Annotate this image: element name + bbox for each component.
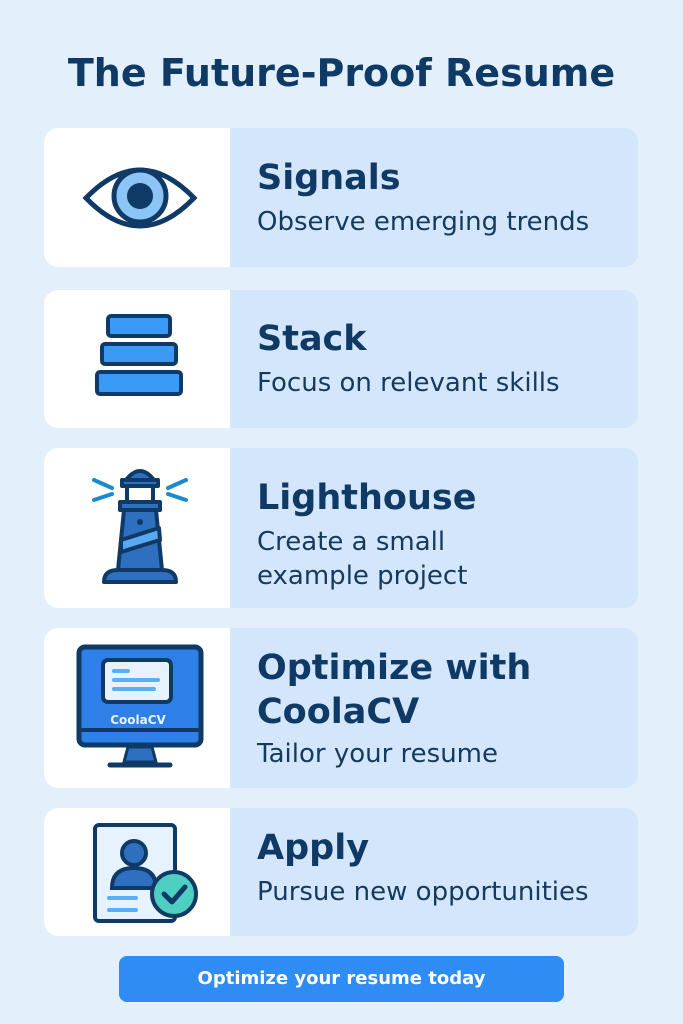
icon: monitor CoolaCV <box>76 644 204 768</box>
panel: stack <box>44 290 638 428</box>
text: signals: Signals <box>257 158 401 198</box>
text: lighthouse: example project <box>257 561 467 591</box>
panel: optimize <box>44 628 638 788</box>
text: signals: Observe emerging trends <box>257 207 589 237</box>
icon: monitor CoolaCV: CoolaCV <box>110 713 167 727</box>
panel: signals <box>44 128 638 267</box>
text: lighthouse: Create a small <box>257 527 445 557</box>
icon: eye <box>82 168 198 228</box>
text: apply: Apply <box>257 828 369 868</box>
icon: resume with check <box>93 823 198 923</box>
icon: stack <box>95 314 183 396</box>
text: apply: Pursue new opportunities <box>257 877 589 907</box>
text: optimize: Optimize with <box>257 648 531 688</box>
text: stack <box>257 319 560 398</box>
text: optimize: Tailor your resume <box>257 739 498 769</box>
text: stack: Focus on relevant skills <box>257 368 560 398</box>
title: The Future-Proof Resume <box>68 51 615 95</box>
button: CTA <box>119 956 564 1002</box>
button: CTA: Optimize your resume today <box>198 968 485 989</box>
panel: apply <box>44 808 638 936</box>
icon: lighthouse <box>92 469 188 584</box>
text: lighthouse <box>257 478 476 591</box>
text: stack: Stack <box>257 319 367 359</box>
text: optimize: CoolaCV <box>257 692 419 732</box>
text: signals <box>257 158 589 237</box>
text: lighthouse: Lighthouse <box>257 478 476 518</box>
text: apply <box>257 828 589 907</box>
panel: lighthouse <box>44 448 638 608</box>
text: optimize <box>256 648 531 769</box>
